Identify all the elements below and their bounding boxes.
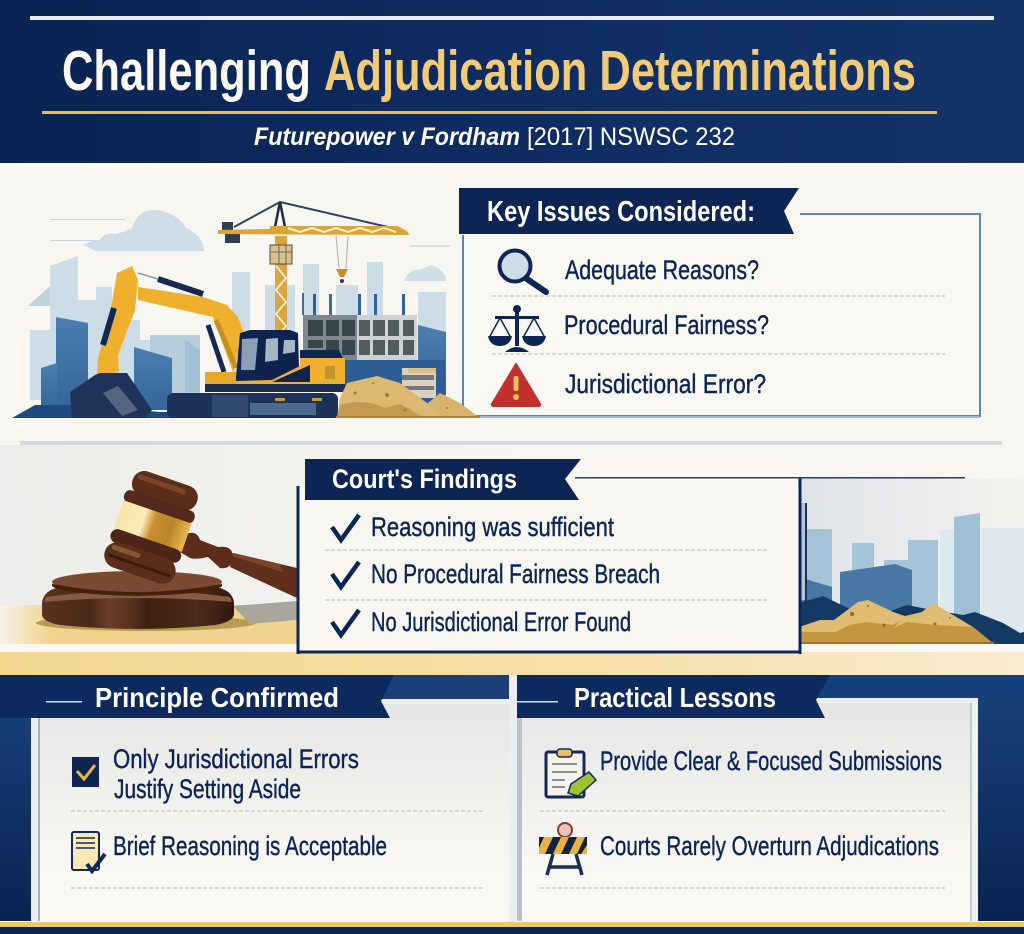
- subtitle: [254, 123, 735, 151]
- skyline: [30, 256, 446, 410]
- icon: road barrier: [539, 823, 587, 875]
- heading ribbon: key issues: Key Issues Considered:: [487, 196, 755, 228]
- finding: jurisdiction: [332, 607, 631, 637]
- icon: warning triangle: [492, 364, 540, 406]
- icon: magnifying glass: [500, 250, 546, 292]
- icon: check: [332, 562, 359, 587]
- court's findings background: [0, 445, 1024, 675]
- icon: checkbox: [72, 757, 99, 787]
- heading ribbon: practical lessons: Practical Lessons: [574, 682, 776, 713]
- gavel shadow: [36, 615, 256, 631]
- lesson item: adjudications: [539, 823, 939, 875]
- panel: practical lessons: [517, 675, 978, 921]
- principle item: brief reasoning: Brief Reasoning is Acceptable: [113, 831, 387, 861]
- ground: [12, 405, 480, 418]
- finding: reasoning: Reasoning was sufficient: [371, 512, 614, 542]
- icon: check: [332, 515, 359, 540]
- panel: principle confirmed: [0, 675, 509, 921]
- sound block: [42, 571, 234, 629]
- heading ribbon: court's findings: [305, 459, 581, 500]
- distant skyline right: [798, 478, 1024, 644]
- item: adequate reasons: [500, 250, 759, 292]
- icon: document with check: [72, 832, 105, 871]
- subtitle: Futurepower v Fordham: [254, 123, 520, 151]
- finding: fairness: No Procedural Fairness Breach: [371, 559, 660, 589]
- heading ribbon: court's findings: Court's Findings: [332, 464, 517, 494]
- finding: fairness: [332, 559, 660, 589]
- icon: check: [332, 610, 359, 635]
- crane: [218, 202, 409, 360]
- icon: clipboard with pen: [546, 749, 596, 797]
- title: Challenging: [62, 39, 311, 103]
- bottom navy section: [0, 675, 1024, 934]
- principle item: only jurisdictional errors: Justify Setting Aside: [114, 774, 301, 804]
- principle item: only jurisdictional errors: Only Jurisdictional Errors: [113, 744, 359, 774]
- principle item: brief reasoning: [72, 831, 387, 871]
- panel frame behind right: [798, 503, 805, 600]
- handle: [180, 533, 297, 598]
- section divider: [20, 441, 1002, 445]
- panel: key issues: [459, 188, 980, 418]
- clouds: [28, 210, 450, 306]
- panel: court's findings: [298, 459, 965, 654]
- title: [62, 39, 916, 103]
- heading ribbon: principle confirmed: [0, 675, 394, 718]
- subtitle: [2017] NSWSC 232: [527, 123, 735, 151]
- finding: jurisdiction: No Jurisdictional Error Found: [371, 607, 631, 637]
- item: adequate reasons: Adequate Reasons?: [565, 255, 759, 285]
- icon: scales of justice: [488, 305, 546, 352]
- construction scene illustration: [12, 202, 480, 418]
- excavator: [70, 266, 345, 418]
- lesson item: submissions: [546, 746, 942, 797]
- gavel head: [101, 467, 204, 587]
- principle item: only jurisdictional errors: [72, 744, 359, 804]
- building under construction: [302, 293, 445, 407]
- icon: gavel: [36, 467, 297, 631]
- heading ribbon: practical lessons: [517, 675, 830, 718]
- item: jurisdictional error: [492, 364, 766, 406]
- heading ribbon: principle confirmed: Principle Confirmed: [95, 682, 339, 713]
- item: jurisdictional error: Jurisdictional Error?: [565, 369, 766, 399]
- header banner: [0, 0, 1024, 163]
- item: procedural fairness: [488, 305, 769, 352]
- heading ribbon: key issues: [459, 188, 799, 234]
- sand piles and materials: [336, 368, 480, 418]
- item: procedural fairness: Procedural Fairness?: [564, 310, 769, 340]
